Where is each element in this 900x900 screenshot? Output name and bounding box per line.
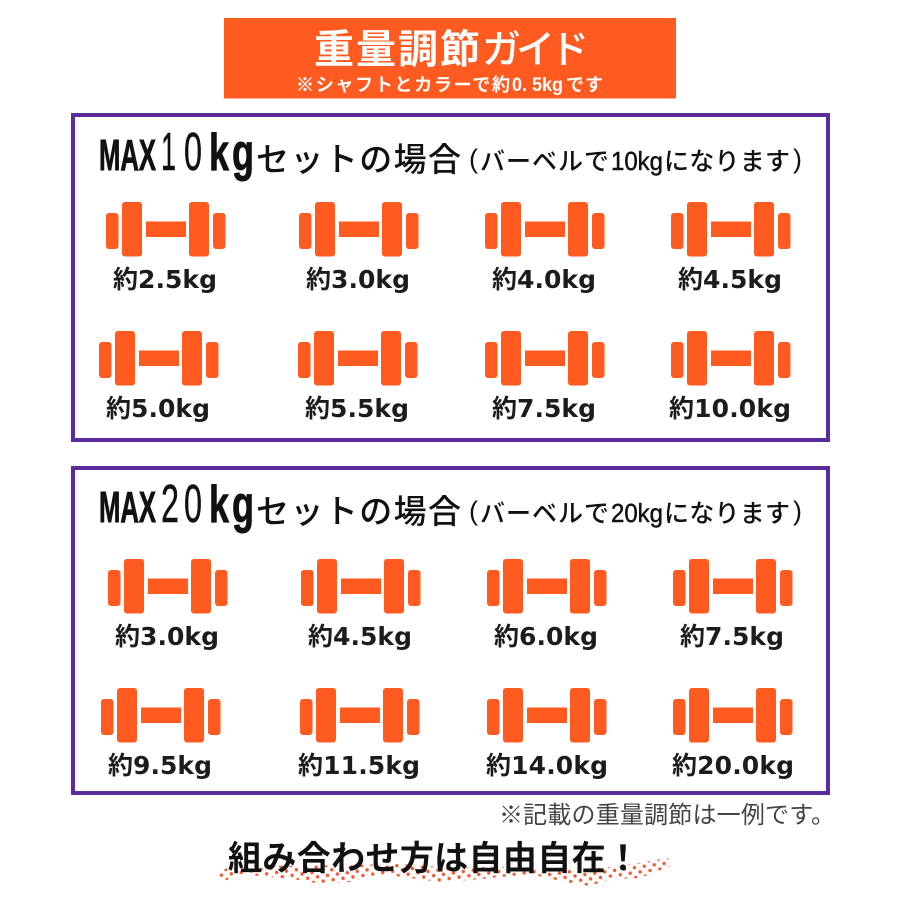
dumbbell: about 4.0kg — [485, 202, 604, 294]
heading: MAX 10kg set: k — [209, 124, 229, 182]
heading: MAX 20kg set — [99, 474, 802, 534]
heading: MAX 20kg set: になります — [664, 494, 790, 530]
title: 重量調節 — [314, 17, 480, 75]
dumbbell: about 2.5kg — [106, 202, 226, 294]
dumbbell: about 3.0kg — [108, 559, 228, 651]
heading: MAX 20kg set: 20kg — [611, 498, 663, 528]
heading: MAX 20kg set: セットの場合 — [256, 485, 461, 533]
dumbbell: about 11.5kg — [298, 688, 420, 780]
tagline: 組み合わせ方は自由自在！ — [228, 831, 640, 880]
subtitle — [296, 71, 603, 97]
title banner — [224, 17, 676, 98]
heading: MAX 20kg set: バーベルで — [480, 494, 609, 530]
dumbbell: about 20.0kg — [672, 688, 794, 780]
subtitle: 0. 5kg — [512, 75, 563, 96]
subtitle: ※シャフトとカラーで約 — [296, 71, 510, 97]
heading: MAX 10kg set: セットの場合 — [256, 133, 461, 181]
dumbbell: about 3.0kg — [299, 202, 418, 294]
dumbbell: about 7.5kg: 約7.5kg — [492, 394, 596, 423]
dumbbell: about 7.5kg — [485, 331, 604, 423]
dumbbell: about 3.0kg: 約3.0kg — [115, 622, 219, 651]
panel: MAX 10kg set — [73, 115, 828, 440]
panel: MAX 20kg set — [73, 468, 828, 793]
footnote: ※記載の重量調節は一例です。 — [499, 795, 835, 830]
dumbbell: about 9.5kg: 約9.5kg — [108, 751, 212, 780]
heading: MAX 20kg set: ( — [469, 496, 478, 526]
heading: MAX 20kg set: MAX — [99, 483, 156, 532]
heading: MAX 10kg set: ( — [469, 144, 478, 174]
heading: MAX 10kg set: 10kg — [611, 146, 663, 176]
dumbbell: about 4.0kg: 約4.0kg — [492, 265, 596, 294]
dumbbell: about 4.5kg: 約4.5kg — [308, 622, 412, 651]
dumbbell: about 5.5kg — [298, 331, 418, 423]
dotted wave highlight — [217, 858, 671, 886]
dumbbell: about 5.0kg — [99, 331, 218, 423]
dumbbell: about 11.5kg: 約11.5kg — [298, 751, 420, 780]
dumbbell: about 4.5kg: 約4.5kg — [678, 265, 782, 294]
heading: MAX 10kg set: MAX — [99, 131, 156, 180]
dumbbell: about 7.5kg: 約7.5kg — [680, 622, 784, 651]
dumbbell: about 5.5kg: 約5.5kg — [305, 394, 409, 423]
heading: MAX 20kg set: 0 — [184, 474, 202, 534]
heading: MAX 10kg set: 1 — [161, 122, 176, 182]
heading: MAX 20kg set: k — [209, 476, 229, 534]
heading: MAX 10kg set: バーベルで — [480, 142, 609, 178]
heading: MAX 20kg set: ) — [793, 496, 802, 526]
dumbbell: about 20.0kg: 約20.0kg — [672, 751, 794, 780]
subtitle: です — [566, 71, 603, 97]
dumbbell: about 14.0kg — [486, 688, 608, 780]
dumbbell: about 4.5kg — [671, 202, 790, 294]
dumbbell: about 10.0kg — [669, 331, 791, 423]
dumbbell: about 7.5kg — [673, 559, 792, 651]
heading: MAX 10kg set: ) — [793, 144, 802, 174]
heading: MAX 10kg set: g — [232, 124, 254, 182]
title — [314, 17, 589, 75]
heading: MAX 20kg set: g — [232, 476, 254, 534]
dumbbell: about 3.0kg: 約3.0kg — [306, 265, 410, 294]
dumbbell: about 5.0kg: 約5.0kg — [106, 394, 210, 423]
dumbbell: about 6.0kg: 約6.0kg — [494, 622, 598, 651]
heading: MAX 10kg set: 0 — [184, 122, 202, 182]
heading: MAX 10kg set: になります — [664, 142, 790, 178]
dumbbell: about 4.5kg — [301, 559, 420, 651]
dumbbell: about 10.0kg: 約10.0kg — [669, 394, 791, 423]
dumbbell: about 2.5kg: 約2.5kg — [113, 265, 217, 294]
dumbbell: about 14.0kg: 約14.0kg — [486, 751, 608, 780]
heading: MAX 20kg set: 2 — [161, 474, 179, 534]
title: ガイド — [482, 19, 589, 75]
dumbbell: about 6.0kg — [487, 559, 606, 651]
heading: MAX 10kg set — [99, 122, 802, 182]
dumbbell: about 9.5kg — [101, 688, 220, 780]
